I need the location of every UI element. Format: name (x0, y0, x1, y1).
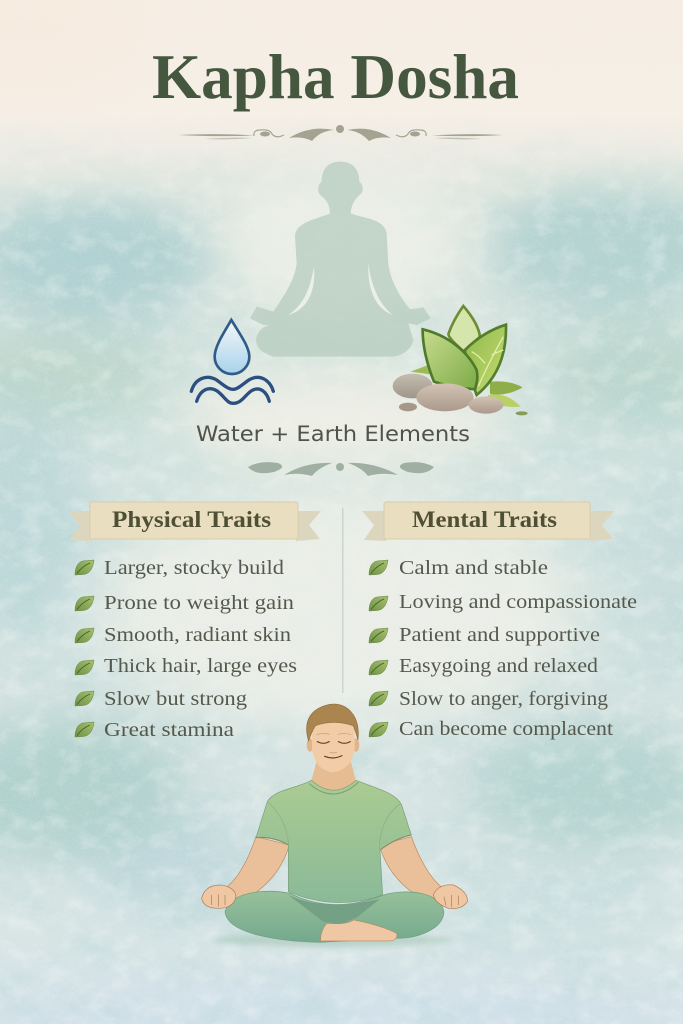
banner: physical traits (68, 502, 321, 541)
ornament: top divider (178, 125, 503, 141)
list: physical traits: Larger, stocky build (104, 557, 284, 579)
silhouette: meditating figure (250, 162, 431, 357)
list: physical traits: Thick hair, large eyes (104, 655, 297, 677)
list: mental traits: Patient and supportive (399, 624, 600, 646)
arms (222, 837, 289, 903)
list: mental traits: Easygoing and relaxed (399, 655, 598, 677)
banner: physical traits: Physical Traits (112, 507, 271, 532)
list: physical traits: Slow but strong (104, 688, 247, 710)
list: mental traits: Loving and compassionate (399, 591, 637, 613)
legs (225, 891, 444, 942)
list: mental traits (369, 557, 637, 740)
list: mental traits: Slow to anger, forgiving (399, 688, 608, 710)
shirt details (256, 782, 411, 850)
shirt (256, 780, 411, 903)
banner: mental traits: Mental Traits (412, 507, 557, 532)
list: physical traits: Great stamina (104, 719, 234, 741)
neck (311, 758, 356, 791)
icon: leaves and stones (393, 306, 528, 415)
foot (321, 920, 397, 941)
illustration: meditating man (202, 704, 467, 947)
list: mental traits: Calm and stable (399, 557, 548, 579)
ornament: lower divider (248, 462, 434, 476)
element label: Water + Earth Elements (196, 422, 470, 446)
face (312, 718, 355, 772)
list: physical traits: Smooth, radiant skin (104, 624, 291, 646)
column divider (342, 508, 344, 693)
hands (202, 885, 467, 909)
list: physical traits: Prone to weight gain (104, 592, 294, 614)
panel: mental traits (362, 502, 637, 740)
banner: mental traits (362, 502, 614, 541)
ears (307, 738, 313, 752)
list: physical traits (75, 557, 297, 741)
title: Kapha Dosha (152, 42, 519, 112)
icon: water drop with waves (191, 320, 273, 403)
facial features (317, 733, 351, 758)
panel: physical traits (68, 502, 321, 741)
silhouette highlights (288, 263, 393, 315)
hair (307, 704, 358, 741)
list: mental traits: Can become complacent (399, 718, 613, 740)
